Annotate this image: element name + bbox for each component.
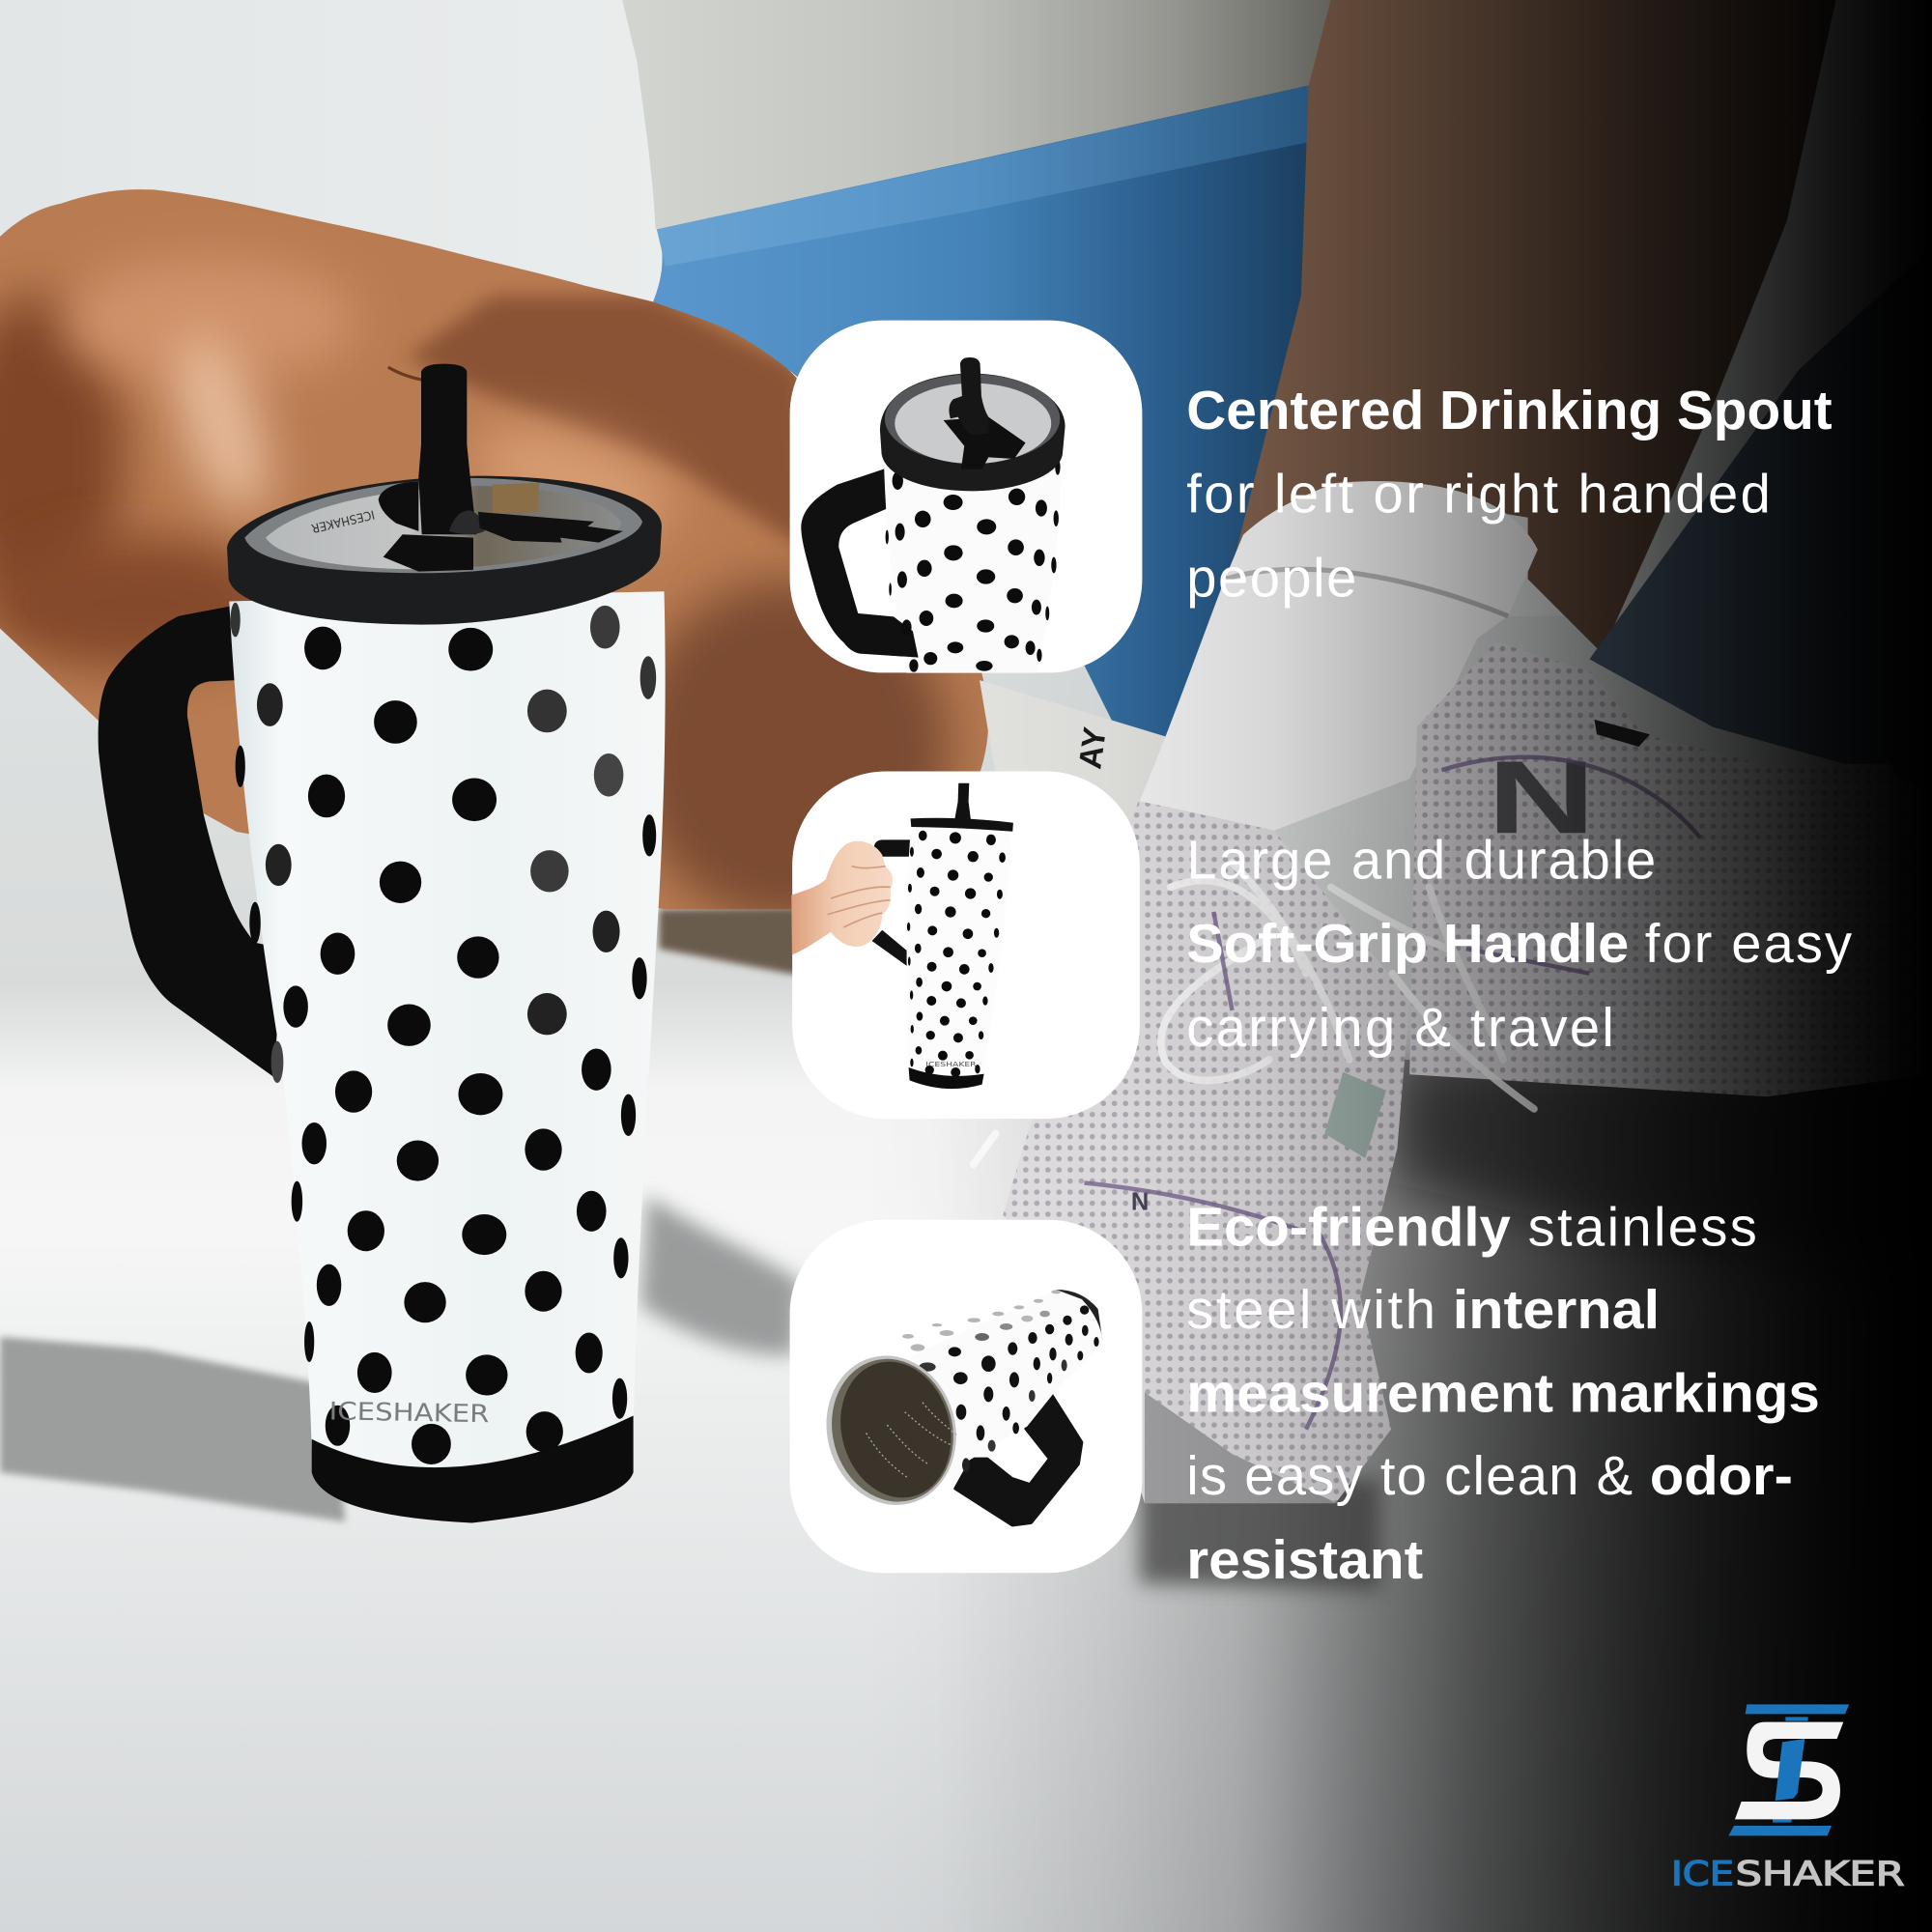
floor shadow behind mug — [0, 1337, 345, 1521]
text: soft-grip handle: carrying & travel — [1186, 997, 1614, 1058]
upper thigh shadow beyond crease — [407, 296, 813, 554]
dark band on left of thigh — [0, 296, 124, 616]
logo wordmark — [1671, 1855, 1905, 1893]
lid wordmark: ICESHAKER — [310, 507, 376, 536]
text: eco-friendly stainless steel: steel with — [1186, 1279, 1435, 1340]
dots — [919, 1305, 1099, 1472]
left sock lettering: AY — [1072, 725, 1114, 771]
text: soft-grip handle: Soft-Grip Handle — [1186, 913, 1629, 974]
logo mark — [1728, 1704, 1849, 1835]
redrawn handle overlap — [892, 616, 919, 658]
logo wordmark: ICE — [1671, 1855, 1734, 1893]
handle — [872, 839, 911, 967]
brown reflection — [493, 483, 539, 514]
floor darkening toward the right — [936, 1060, 1932, 1932]
text: eco-friendly stainless steel: odor- — [1650, 1445, 1793, 1506]
panel: soft-grip handle — [791, 771, 1140, 1119]
tank top — [622, 0, 1337, 229]
dots — [886, 459, 1061, 672]
text: centered drinking spout — [1186, 380, 1833, 608]
text: eco-friendly stainless steel: internal — [1453, 1279, 1660, 1340]
text: soft-grip handle — [1186, 829, 1852, 1058]
right background patch — [1589, 246, 1932, 788]
text: eco-friendly stainless steel: resistant — [1186, 1529, 1423, 1590]
spout — [949, 357, 989, 436]
shoe logo: N — [1488, 739, 1596, 855]
lid — [880, 374, 1065, 491]
polka dots — [231, 603, 656, 1464]
arm bar — [478, 512, 623, 543]
heel sole — [1145, 1392, 1337, 1503]
shoe purple trim — [1084, 757, 1700, 1430]
text: eco-friendly stainless steel: measurement markings — [1186, 1363, 1820, 1424]
mug wordmark: ICESHAKER — [925, 1061, 977, 1068]
logo wordmark: SHAKER — [1736, 1855, 1905, 1893]
mechanism — [379, 481, 473, 572]
hand — [791, 841, 893, 954]
knuckle shading — [828, 867, 891, 927]
bottom rim — [1056, 1290, 1103, 1343]
broad thigh light — [62, 259, 357, 382]
panel: stainless steel interior — [790, 1220, 1142, 1573]
front shoe — [1003, 801, 1409, 1503]
interior measurement markings — [867, 1403, 958, 1478]
logo: iceshaker — [1671, 1704, 1905, 1893]
large polka dot mug — [99, 364, 666, 1523]
sheen highlight — [158, 326, 286, 525]
lower leg light — [468, 402, 680, 534]
panel: centered drinking spout — [790, 321, 1142, 673]
text: eco-friendly stainless steel: is easy to clean & — [1186, 1445, 1633, 1506]
dots — [907, 831, 1006, 1077]
text: eco-friendly stainless steel: stainless — [1528, 1197, 1757, 1258]
left sock — [980, 680, 1182, 936]
handle — [956, 1394, 1080, 1523]
shoe sidewall logo: N — [1131, 1189, 1149, 1216]
base — [312, 1416, 634, 1523]
interior — [826, 1350, 966, 1510]
straw — [418, 364, 476, 534]
text: eco-friendly stainless steel — [1186, 1197, 1820, 1590]
lid clear panel — [266, 486, 621, 569]
mug body — [884, 457, 1061, 673]
text: centered drinking spout: Centered Drinking Spout — [1186, 380, 1833, 440]
text: centered drinking spout: for left or right handed — [1186, 464, 1771, 525]
cast shadow of rear shoe — [1392, 1060, 1932, 1282]
base — [909, 1067, 984, 1089]
lid window — [244, 478, 642, 573]
shoe pale green panel — [1324, 1072, 1386, 1158]
crease — [387, 365, 421, 381]
spout mechanism — [944, 417, 1026, 469]
tube — [911, 1290, 1103, 1490]
straw — [954, 783, 971, 819]
lid — [227, 364, 662, 625]
thigh — [0, 189, 988, 910]
shorts waistband — [657, 84, 1316, 267]
rear shoe — [1409, 642, 1932, 1096]
text: eco-friendly stainless steel: Eco-friendly — [1186, 1197, 1511, 1258]
faded dots — [902, 1290, 1061, 1351]
lid — [911, 818, 1013, 832]
mug body — [229, 591, 666, 1469]
rear shoe collar — [1595, 720, 1650, 747]
handle — [99, 605, 283, 1077]
spout cap — [449, 510, 485, 534]
shoe laces — [974, 863, 1534, 1164]
text: centered drinking spout: people — [1186, 547, 1356, 608]
text: soft-grip handle: Large and durable — [1186, 829, 1656, 890]
lower leg dark — [629, 579, 949, 924]
lid top ring — [885, 374, 1060, 463]
dark patch under thigh — [659, 906, 887, 985]
handle — [801, 469, 919, 658]
mug wordmark: ICESHAKER — [328, 1397, 490, 1429]
dark under-thigh — [0, 536, 283, 671]
opening rim — [810, 1341, 973, 1520]
blue shorts — [653, 84, 1316, 739]
text: soft-grip handle: for easy — [1645, 913, 1852, 974]
right leg skin — [1233, 0, 1836, 653]
sock — [1140, 481, 1538, 831]
sock cuff fold — [1225, 569, 1508, 616]
mug body — [907, 826, 1011, 1075]
plant shadow on floor — [640, 1195, 801, 1355]
lid window — [895, 384, 1051, 464]
shadow below shoe — [1140, 1479, 1380, 1589]
inner lip — [816, 1346, 969, 1516]
